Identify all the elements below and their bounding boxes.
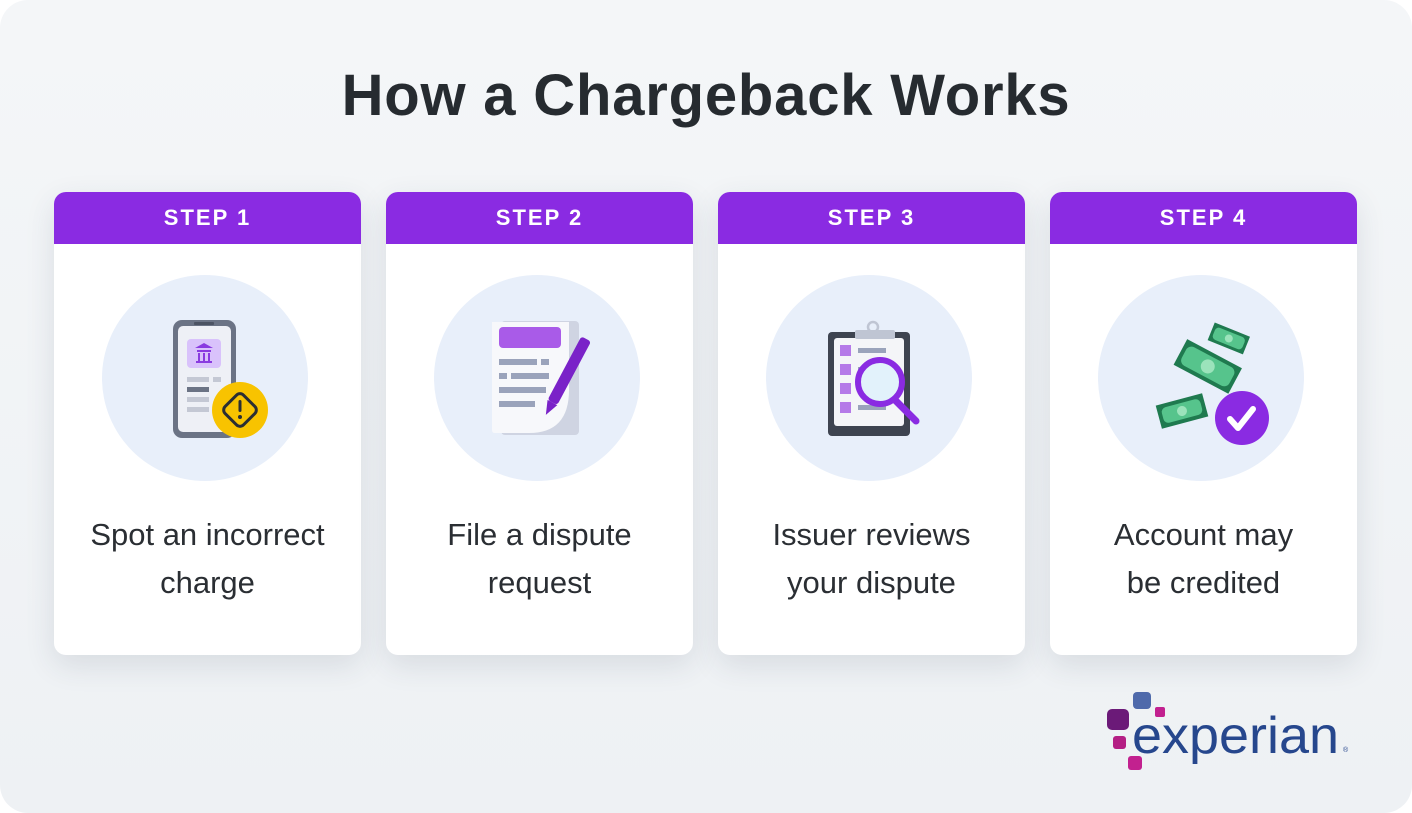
panel: step 2 [386,192,693,655]
text: step 3: your dispute [787,565,956,600]
logo: experian: ® [1343,746,1349,754]
text: step 3 [772,517,971,600]
step 3 header [718,192,1025,244]
title: How a Chargeback Works [342,63,1070,128]
text: step 3: Issuer reviews [772,517,971,552]
panel: step 4 [1050,192,1357,655]
step 3 header: STEP 3 [828,205,915,230]
panel: step 1 [54,192,361,655]
text: step 1: Spot an incorrect [90,517,325,552]
text: step 4: Account may [1114,517,1293,552]
panel: step 3 [718,192,1025,655]
text: step 4: be credited [1127,565,1280,600]
step 1 header [54,192,361,244]
logo: experian: experian [1132,707,1339,765]
step 4 header [1050,192,1357,244]
step 2 header: STEP 2 [496,205,583,230]
icon: document with pen [434,275,640,481]
text: step 4 [1114,517,1293,600]
step 1 header: STEP 1 [164,205,251,230]
step 2 header [386,192,693,244]
text: step 1 [90,517,325,600]
icon: phone with warning [102,275,308,481]
text: step 1: charge [160,565,255,600]
text: step 2: request [488,565,591,600]
text: step 2 [447,517,632,600]
icon: money with check [1098,275,1304,481]
text: step 2: File a dispute [447,517,632,552]
logo: experian [1107,692,1349,770]
icon: clipboard with magnifier [766,275,972,481]
step 4 header: STEP 4 [1160,205,1247,230]
